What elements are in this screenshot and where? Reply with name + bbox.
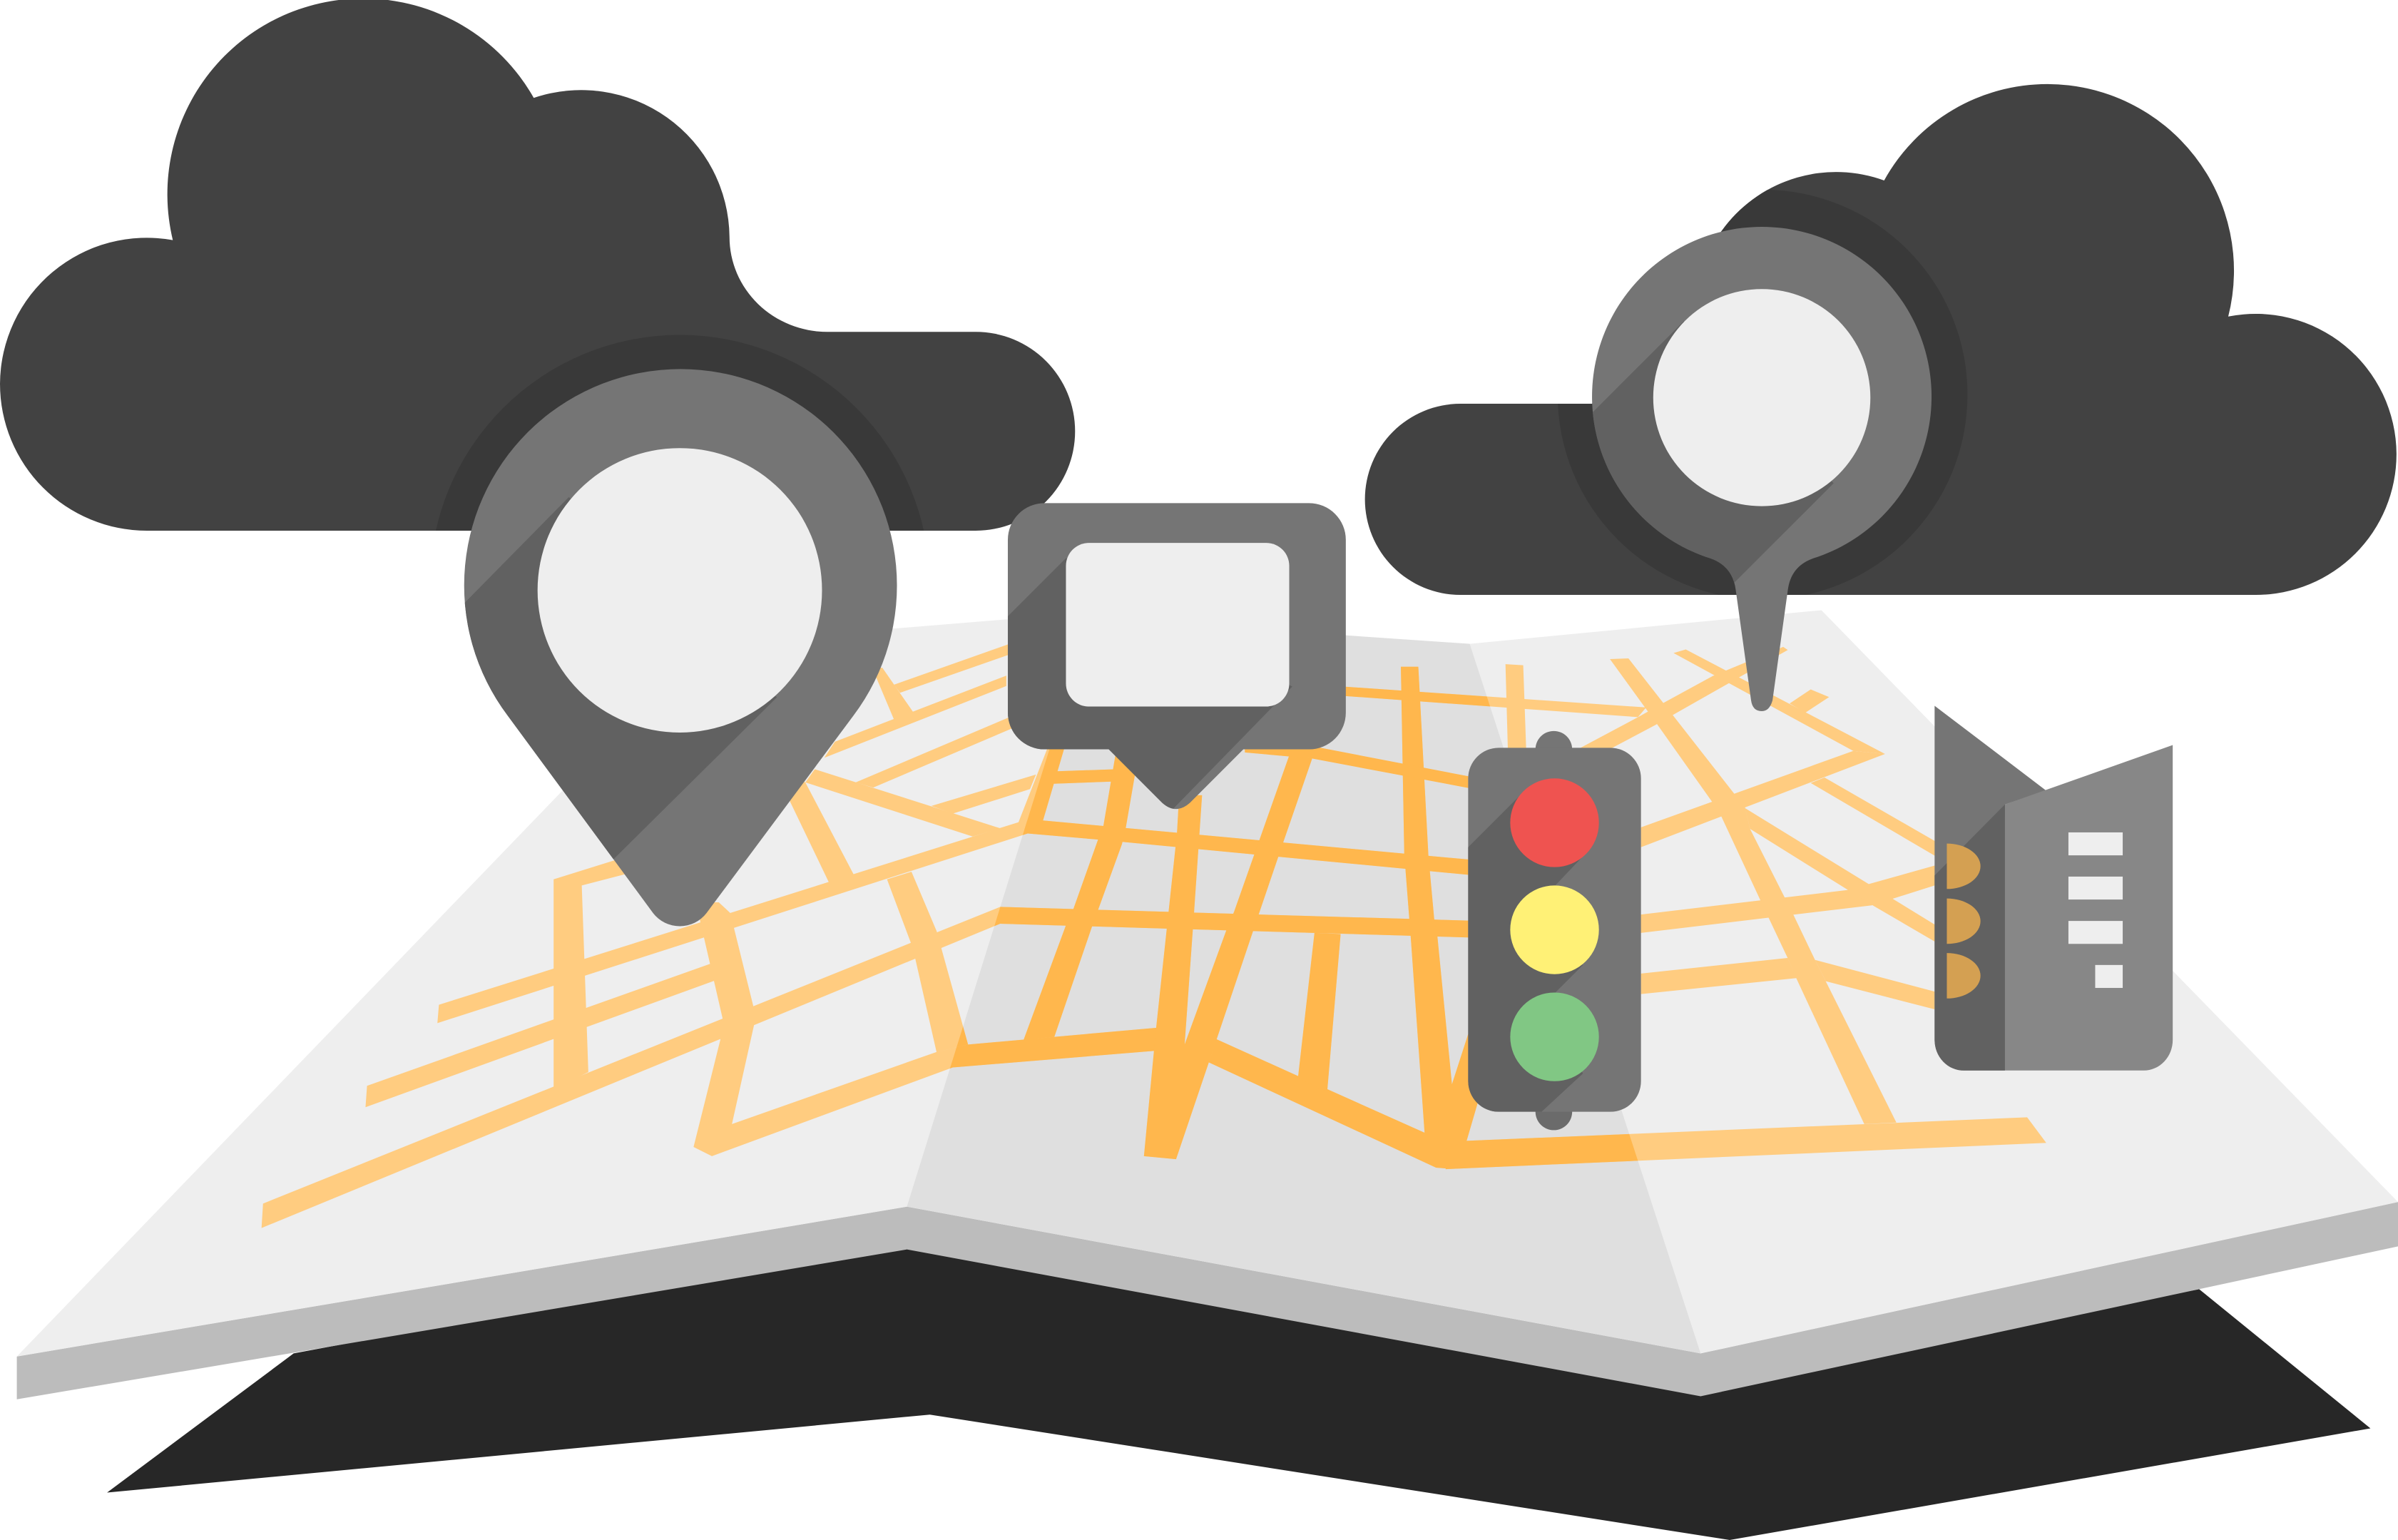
right cloud pin shadow [1558, 190, 1967, 599]
right cloud [1365, 84, 2397, 599]
right round map pin [1575, 227, 1932, 711]
folded map surface [17, 610, 2398, 1357]
map edge band [17, 1202, 2398, 1399]
building awnings [1947, 844, 1981, 999]
building windows [2068, 832, 2123, 988]
roads on shaded fold [950, 666, 1638, 1170]
yellow lamp [1510, 885, 1599, 974]
roads on light panels [262, 633, 2046, 1228]
traffic light [1461, 731, 1641, 1130]
large round map pin [444, 369, 897, 927]
left cloud [0, 0, 1076, 531]
red lamp [1510, 778, 1599, 867]
rectangular callout pin [1001, 503, 1346, 810]
building [1934, 705, 2173, 1071]
left cloud pin shadow [437, 335, 924, 531]
map shadow base [107, 1239, 2370, 1540]
map middle fold panel [907, 618, 1700, 1353]
green lamp [1510, 992, 1599, 1081]
road network [262, 633, 2046, 1228]
